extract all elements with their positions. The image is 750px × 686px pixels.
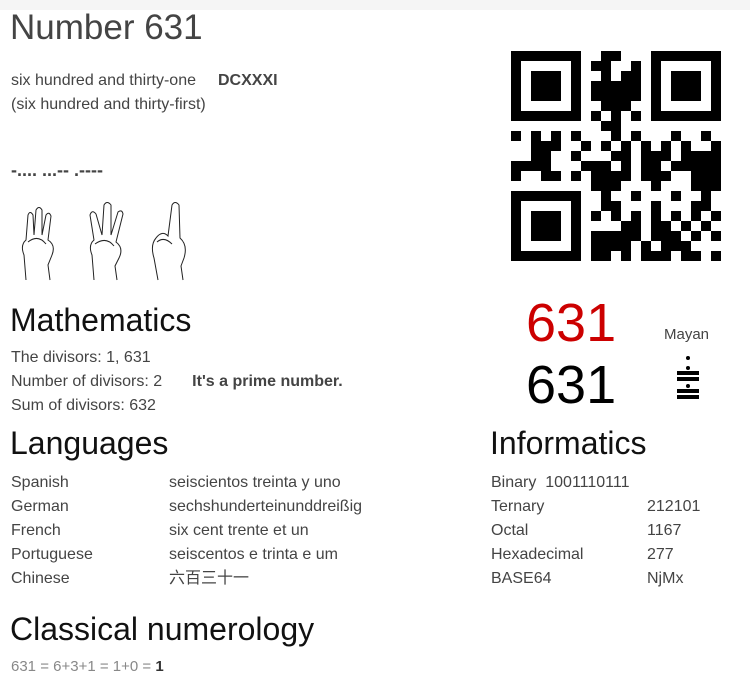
text: sechshunderteinunddreißig bbox=[169, 498, 362, 515]
numerology formula: 631 = 6+3+1 = 1+0 = 1 bbox=[11, 658, 164, 675]
languages table bbox=[11, 474, 93, 587]
informatics table: Ternary bbox=[491, 498, 544, 515]
text: morse: -.... ...-- .---- bbox=[11, 160, 103, 180]
text: NjMx bbox=[647, 570, 683, 587]
heading: mathematics: Mathematics bbox=[10, 302, 191, 338]
math facts: Number of divisors: 2 It's a prime number. bbox=[11, 373, 343, 390]
informatics table: Hexadecimal bbox=[491, 546, 583, 563]
math facts bbox=[11, 349, 343, 414]
icon: mayan numeral bbox=[677, 356, 699, 399]
text: seiscientos treinta y uno bbox=[169, 474, 341, 491]
text: 六百三十一 bbox=[169, 570, 249, 587]
informatics table: Octal bbox=[491, 522, 528, 539]
QR code bbox=[511, 51, 721, 261]
informatics table: Binary 1001110111 bbox=[491, 474, 629, 491]
big number black: 631 bbox=[526, 355, 616, 415]
languages table: Spanish bbox=[11, 474, 69, 491]
text: seiscentos e trinta e um bbox=[169, 546, 338, 563]
icon: hand signs bbox=[22, 202, 186, 280]
text: six cent trente et un bbox=[169, 522, 309, 539]
languages table: Portuguese bbox=[11, 546, 93, 563]
informatics table bbox=[491, 474, 629, 587]
text: 277 bbox=[647, 546, 674, 563]
text: name bbox=[11, 72, 278, 113]
informatics table: BASE64 bbox=[491, 570, 551, 587]
heading: numerology: Classical numerology bbox=[10, 611, 314, 647]
math facts: The divisors: 1, 631 bbox=[11, 349, 151, 366]
heading: languages: Languages bbox=[10, 425, 168, 461]
mayan label: Mayan bbox=[664, 326, 709, 343]
text: 1167 bbox=[647, 522, 681, 539]
text: name: six hundred and thirty-one DCXXXI bbox=[11, 72, 278, 89]
languages table: German bbox=[11, 498, 69, 515]
text: name: (six hundred and thirty-first) bbox=[11, 96, 206, 113]
heading: informatics: Informatics bbox=[490, 425, 646, 461]
title: Number 631 bbox=[10, 8, 203, 47]
languages table: French bbox=[11, 522, 61, 539]
math facts: Sum of divisors: 632 bbox=[11, 397, 156, 414]
big number red: 631 bbox=[526, 293, 616, 353]
languages table: Chinese bbox=[11, 570, 70, 587]
text: 212101 bbox=[647, 498, 700, 515]
